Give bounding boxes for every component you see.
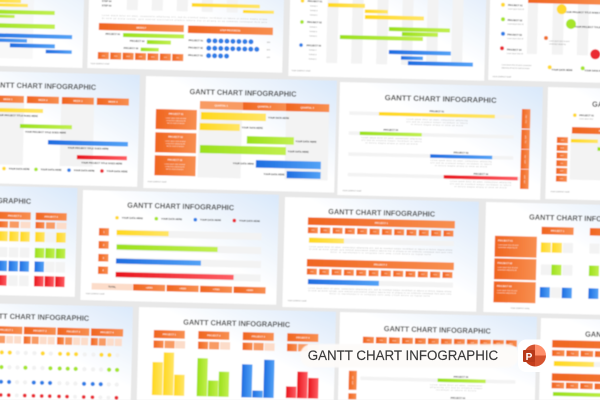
slide: project box matrix right: Lorem ipsum dolor sit amet xyxy=(497,289,518,292)
slide: weekly gantt with legend: YOUR PROJECT TITLE GOES HERE xyxy=(68,147,109,151)
slide: gantt with vertical quarter labels: Lorem ipsum dolor sit amet, consectetur adipiscing xyxy=(450,180,511,184)
slide: project box matrix right: consectetur adipiscing elit xyxy=(497,291,517,295)
slide: two project monthly tracks: FEB xyxy=(322,271,327,274)
slide: column charts: PROJECT 4 xyxy=(296,336,310,340)
slide: gantt with vertical quarter labels: OCT - DEC xyxy=(526,114,528,123)
slide: project box matrix right: PROJECT 01 xyxy=(498,239,513,243)
slide: bottom centre timeline: MAR xyxy=(392,339,397,342)
slide: gantt with vertical quarter labels: et dolore magna aliqua ut enim ad minim xyxy=(365,141,418,146)
slide: bottom centre timeline: NOV xyxy=(496,343,501,345)
slide: weekly and step progress: PROJECT 03 xyxy=(124,47,139,50)
slide: two project monthly tracks: Ut enim ad minim veniam, quis nostrud exercitation ullamco laboris nisi ut aliquip ex ea commodo consequat duis aute irure xyxy=(308,289,451,296)
slide: column charts: PROJECT 1 xyxy=(163,333,177,336)
slide: gantt with vertical quarter labels: Lorem ipsum dolor sit amet, consectetur adipiscing xyxy=(362,136,422,141)
slide: gantt with vertical quarter labels: elit sed do eiusmod tempor incididunt ut labore xyxy=(362,139,422,143)
slide: bottom centre timeline: MAY xyxy=(419,340,423,343)
slide: quarterly gantt with project boxes: Lorem ipsum dolor sit amet xyxy=(165,162,186,166)
slide: bottom centre timeline: APR xyxy=(406,340,410,343)
slide: top-right bubble timeline: Lorem ipsum dolor sit xyxy=(507,52,523,55)
slide: dot matrix: PROJECT 4 xyxy=(100,331,114,334)
slide: quarterly gantt with project boxes: YOUR DATA HERE xyxy=(268,116,290,120)
slide: progress bars with totals: YOUR DATA HERE xyxy=(161,218,183,221)
slide: quarterly gantt with project boxes xyxy=(143,76,337,193)
slide: right monthly gantt: MAR xyxy=(560,146,565,150)
slide: project box matrix right: PROJECT 1 xyxy=(551,230,565,233)
slide: top-right bubble timeline: Lorem ipsum dolor sit xyxy=(507,22,524,26)
slide: project box matrix right: YOUR COMPANY NAME xyxy=(510,307,530,310)
slide: project subtasks gantt: Subtask B xyxy=(310,9,318,12)
slide: weekly and step progress: WEEKLY xyxy=(136,26,147,30)
slide: project box matrix right: consectetur adipiscing elit xyxy=(498,246,518,249)
slide: two project monthly tracks: JUN xyxy=(372,273,376,275)
slide: two project monthly tracks: PROJECT 2 xyxy=(374,263,388,267)
slide: project box matrix right: Lorem ipsum dolor sit amet xyxy=(498,243,519,247)
slide: gantt with vertical quarter labels: PROJECT 04 xyxy=(474,173,489,176)
icon: PowerPoint logo tile xyxy=(518,340,551,372)
slide: progress bars with totals: 3 xyxy=(103,257,105,260)
slide: bottom centre timeline: APR - JUN xyxy=(351,375,354,385)
slide: weekly and step progress: STEP 03 xyxy=(102,4,112,8)
slide: quarterly gantt with project boxes: PROJECT 03 xyxy=(168,159,183,162)
slide: project subtasks gantt: PROJECT 02 xyxy=(307,21,322,24)
slide: bottom centre timeline: JUL xyxy=(445,342,448,344)
slide: progress bars with totals: TOTAL xyxy=(108,286,117,289)
slide: column charts xyxy=(137,307,336,400)
slide: progress bars with totals: +5000 xyxy=(246,289,254,292)
slide: dot matrix: PROJECT 1 xyxy=(0,329,14,332)
slide: two project monthly tracks: SEP xyxy=(409,274,413,276)
slide: quarterly gantt with project boxes: PROJECT 02 xyxy=(168,136,184,139)
slide: gantt with vertical quarter labels: PROJECT 01 xyxy=(429,110,445,113)
slide: project box matrix right: PROJECT 02 xyxy=(497,262,513,265)
slide: top-right bubble timeline: YOUR COMPANY NAME xyxy=(492,75,512,79)
slide: two project monthly tracks: Ut enim ad minim veniam, quis nostrud exercitation ullamco laboris nisi ut aliquip ex ea commodo consequat duis aute irure xyxy=(309,248,452,254)
slide: right monthly gantt: PROJECT 01 xyxy=(579,114,595,117)
slide: progress bars with totals: +7000 xyxy=(213,288,220,291)
slide: two project monthly tracks: MAY xyxy=(359,271,364,274)
slide: bottom centre timeline: PROJECT 04 xyxy=(454,376,469,379)
slide: two project monthly tracks: MAR xyxy=(335,271,339,274)
slide: quarterly gantt with project boxes: YOUR DATA HERE xyxy=(233,162,254,166)
slide: gantt with vertical quarter labels: et dolore magna aliqua ut enim ad minim xyxy=(411,123,464,127)
slide: weekly gantt with legend: YOUR DATA HERE xyxy=(107,170,128,173)
slide: right monthly gantt: JUL xyxy=(560,163,563,165)
slide: weekly and step progress: PROJECT 01 xyxy=(188,39,204,43)
slide: gantt with vertical quarter labels: elit sed do eiusmod tempor incididunt ut labore xyxy=(431,161,492,166)
slide: weekly and step progress: 90% xyxy=(267,49,271,51)
slide: right monthly gantt: SEP xyxy=(560,171,564,173)
slide: right monthly gantt: JAN xyxy=(561,139,565,142)
slide: two project monthly tracks: APR xyxy=(348,230,352,233)
slide: quarterly gantt with project boxes: YOUR COMPANY NAME xyxy=(147,180,167,184)
slide: right monthly gantt: Lorem ipsum dolor xyxy=(579,117,594,121)
slide: quarterly gantt with project boxes: consectetur adipiscing elit xyxy=(165,165,185,168)
slide: bottom centre timeline: SEP xyxy=(471,342,475,344)
slide: bottom-right monthly tracks: JAN xyxy=(556,384,560,387)
slide: right monthly gantt xyxy=(545,87,600,204)
slide: two project monthly tracks: Dolor in reprehenderit in voluptate velit esse cillum dolore eu fugiat nulla xyxy=(331,251,431,256)
slide: quarterly gantt with project boxes: consectetur adipiscing elit xyxy=(166,142,186,145)
slide: gantt with vertical quarter labels: GANTT CHART INFOGRAPHIC xyxy=(385,93,497,105)
slide: bottom centre timeline xyxy=(338,312,537,400)
slide: project subtasks gantt: PROJECT 03 xyxy=(306,44,322,48)
slide: progress bars with totals: +4000 xyxy=(179,287,187,290)
slide: gantt with vertical quarter labels xyxy=(337,82,543,200)
slide: two project monthly tracks: FEB xyxy=(324,230,328,232)
slide: gantt with vertical quarter labels: et dolore magna aliqua ut enim ad minim xyxy=(435,164,488,168)
slide: gantt with vertical quarter labels: Lorem ipsum dolor sit amet, consectetur adipiscing xyxy=(407,118,468,122)
slide: quarterly gantt with project boxes: YOUR DATA HERE xyxy=(242,126,263,130)
slide: quarterly gantt with project boxes: YOUR DATA HERE xyxy=(288,150,309,154)
slide: quarterly gantt with project boxes: GANTT CHART INFOGRAPHIC xyxy=(189,87,297,99)
slide: bottom centre timeline: DEC xyxy=(509,343,514,345)
slide: weekly and step progress: JUN xyxy=(164,57,168,59)
slide: weekly and step progress: YOUR COMPANY NAME xyxy=(90,62,110,66)
slide: progress bars with totals: YOUR DATA HERE xyxy=(200,219,222,222)
slide: column charts: PROJECT 3 xyxy=(252,335,266,339)
slide: top-right bubble timeline: YOUR DATA HERE xyxy=(551,69,573,72)
slide: weekly and step progress: STEP PROGRESS xyxy=(220,29,241,33)
slide: two project monthly tracks: JAN xyxy=(311,229,315,232)
slide: weekly gantt with legend: YOUR PROJECT TITLE GOES HERE xyxy=(81,161,123,165)
slide: bottom-right monthly tracks: FEB xyxy=(571,353,575,355)
slide: weekly and step progress: JUL xyxy=(176,57,179,59)
slide: project subtasks gantt: Subtask A xyxy=(309,25,318,29)
slide: weekly and step progress: FEB xyxy=(114,56,118,58)
slide: two project monthly tracks: DEC xyxy=(447,233,451,235)
slide: project subtasks gantt: Subtask C xyxy=(310,13,318,17)
slide: weekly and step progress: MAR xyxy=(126,55,131,58)
slide: bottom centre timeline: AUG xyxy=(457,341,462,344)
slide: weekly and step progress: Lorem ipsum dolor sit amet, consectetur adipiscing elit, sed do eiusmod tempor incididunt ut labore et dolore magna aliqua xyxy=(102,14,267,21)
slide: quarterly gantt with project boxes: consectetur adipiscing elit xyxy=(166,119,186,122)
slide: two project monthly tracks: NOV xyxy=(434,233,439,235)
slide: bottom centre timeline: JUN xyxy=(432,341,436,343)
slide: top-right bubble timeline: Lorem ipsum dolor sit xyxy=(508,7,525,11)
slide: bottom centre timeline: adipiscing elit sed do eiusmod tempor xyxy=(430,386,483,390)
slide: project block matrix left: PROJECT 4 xyxy=(45,215,59,219)
slide: gantt with vertical quarter labels: PROJECT 04 xyxy=(383,129,399,132)
slide: quarterly gantt with project boxes: sed do eiusmod tempor xyxy=(166,168,184,171)
slide: project subtasks gantt xyxy=(288,0,487,81)
slide: quarterly gantt with project boxes: PROJECT 01 xyxy=(169,113,184,116)
slide: quarterly gantt with project boxes: YOUR DATA HERE xyxy=(295,140,317,144)
slide: column charts: GANTT CHART INFOGRAPHIC xyxy=(183,318,291,329)
slide: dot matrix: PROJECT 3 xyxy=(67,330,81,334)
slide: bottom-right monthly tracks: FEB xyxy=(570,385,575,387)
slide: quarterly gantt with project boxes: QUARTAL 1 xyxy=(215,104,229,108)
slide: two project monthly tracks: MAR xyxy=(336,229,340,232)
slide: project subtasks gantt: Subtask B xyxy=(309,30,318,33)
slide: top-right bubble timeline: PROJECT 04 xyxy=(507,48,522,52)
slide: project box matrix right: consectetur adipiscing elit xyxy=(497,268,517,272)
slide: weekly and step progress: 40% xyxy=(267,57,270,59)
slide: dot matrix xyxy=(0,302,133,400)
slide: two project monthly tracks: GANTT CHART INFOGRAPHIC xyxy=(328,207,436,219)
slide: weekly and step progress: PROJECT 03 xyxy=(188,54,203,57)
slide: progress bars with totals: YOUR DATA HERE xyxy=(122,217,143,220)
slide: bottom centre timeline: incididunt ut labore et dolore xyxy=(436,388,476,392)
slide: quarterly gantt with project boxes: Lorem ipsum dolor sit amet xyxy=(165,139,186,143)
slide: project subtasks gantt: Subtask C xyxy=(309,34,318,38)
slide: gantt with vertical quarter labels: elit sed do eiusmod tempor incididunt ut labore xyxy=(450,182,511,187)
title pill xyxy=(300,344,519,368)
slide: bottom-right monthly tracks: MAR xyxy=(585,385,589,388)
slide: bottom centre timeline: OCT xyxy=(483,343,487,345)
slide: weekly and step progress: PROJECT 02 xyxy=(130,40,145,43)
slide: bottom-right monthly tracks: JAN xyxy=(557,352,561,355)
slide: two project monthly tracks: Dolor in reprehenderit in voluptate velit esse cillum dolore eu fugiat nulla xyxy=(330,292,430,298)
slide: gantt with vertical quarter labels: JAN - MAR xyxy=(523,174,526,184)
slide: weekly gantt with legend xyxy=(0,70,140,187)
slide: progress bars with totals: GANTT CHART INFOGRAPHIC xyxy=(127,201,235,212)
slide: bottom centre timeline: Lorem ipsum dolor sit amet, consectetur xyxy=(430,383,483,388)
slide: quarterly gantt with project boxes: QUARTAL 2 xyxy=(258,105,272,109)
slide: gantt with vertical quarter labels: et dolore magna aliqua ut enim ad minim xyxy=(454,185,507,189)
slide: project subtasks gantt: YOUR COMPANY NAME xyxy=(291,69,311,73)
slide: two project monthly tracks: AUG xyxy=(396,272,401,275)
slide: top-right bubble timeline: YOUR PROJECT TITLE xyxy=(574,26,600,29)
slide: right monthly gantt: MAY xyxy=(560,154,565,157)
slide: gantt with vertical quarter labels: YOUR COMPANY NAME xyxy=(342,189,362,193)
slide: two project monthly tracks: OCT xyxy=(421,274,425,276)
slide: top-right bubble timeline: PROJECT 03 xyxy=(507,33,523,37)
slide: two project monthly tracks: JAN xyxy=(310,270,314,273)
slide: weekly and step progress: 80% xyxy=(267,42,271,44)
slide: weekly gantt with legend: YOUR DATA HERE xyxy=(41,168,62,172)
slide: weekly gantt with legend: YOUR DATA HERE xyxy=(9,168,30,171)
slide: top-left gantt xyxy=(0,0,85,68)
slide: project block matrix left: PROJECT 3 xyxy=(8,215,22,218)
slide: gantt with vertical quarter labels: Lorem ipsum dolor sit amet, consectetur adipiscing xyxy=(431,159,492,163)
slide: weekly and step progress: MAY xyxy=(151,56,156,59)
slide: two project monthly tracks: Lorem ipsum dolor sit amet, consectetur adipiscing elit, sed do eiusmod tempor incididunt ut labore et dolore magna aliqua xyxy=(308,287,451,293)
slide: top-right bubble timeline: Lorem ipsum dolor sit amet, consectetur xyxy=(501,63,532,67)
slide: gantt with vertical quarter labels: PROJECT 03 xyxy=(454,151,469,155)
slide: weekly and step progress: Ut enim ad minim veniam, quis nostrud exercitation ullamco laboris nisi ut aliquip ex ea commodo consequat duis aute xyxy=(102,17,267,24)
slide: two project monthly tracks: PROJECT 1 xyxy=(375,222,389,225)
slide: two project monthly tracks: JUL xyxy=(384,273,387,275)
slide: right monthly gantt: NOV xyxy=(560,178,564,180)
slide: two project monthly tracks: AUG xyxy=(397,231,402,234)
slide: progress bars with totals: 2 xyxy=(103,244,105,247)
slide: weekly gantt with legend: YOUR DATA HERE xyxy=(74,169,95,173)
slide: top-right bubble timeline: PROJECT 02 xyxy=(508,19,523,22)
slide: weekly and step progress: PROJECT 02 xyxy=(188,46,204,50)
slide: weekly gantt with legend: WEEK 3 xyxy=(73,100,83,103)
slide: quarterly gantt with project boxes: YOUR DATA HERE xyxy=(264,173,285,176)
slide: two project monthly tracks: SEP xyxy=(410,232,414,234)
slide: two project monthly tracks: NOV xyxy=(433,274,438,276)
slide: project subtasks gantt: PROJECT 01 xyxy=(308,0,323,3)
slide: bottom centre timeline: GANTT CHART INFOGRAPHIC xyxy=(384,324,491,336)
slide: quarterly gantt with project boxes: Lorem ipsum dolor sit amet xyxy=(166,116,187,120)
slide: quarterly gantt with project boxes: QUARTAL 3 xyxy=(300,106,315,110)
slide: two project monthly tracks: YOUR COMPANY NAME xyxy=(287,299,307,303)
slide: top-right bubble timeline xyxy=(488,0,600,85)
slide: top-right bubble timeline: adipiscing elit sed do eiusmod tempor xyxy=(501,66,530,70)
slide: weekly and step progress: APR xyxy=(139,55,143,58)
slide: weekly and step progress xyxy=(87,0,285,73)
slide: progress bars with totals: YOUR COMPANY NAME xyxy=(85,292,105,296)
slide: project block matrix left xyxy=(0,183,77,297)
slide: two project monthly tracks: JUL xyxy=(385,231,388,234)
slide: progress bars with totals: +2000 xyxy=(146,286,153,290)
title text: GANTT CHART INFOGRAPHIC xyxy=(308,348,498,363)
slide: project subtasks gantt: Subtask B xyxy=(309,53,317,56)
slide: project subtasks gantt: Subtask A xyxy=(310,4,318,8)
slide: bottom centre timeline: PROJECT 04 xyxy=(451,397,466,400)
slide: two project monthly tracks xyxy=(282,197,479,312)
slide: two project monthly tracks: JUN xyxy=(373,231,377,233)
slide: quarterly gantt with project boxes: sed do eiusmod tempor xyxy=(167,122,185,125)
slide: weekly gantt with legend: WEEK 1 xyxy=(3,98,13,101)
slide: project box matrix right: PROJECT 03 xyxy=(497,285,512,288)
slide: two project monthly tracks: MAY xyxy=(360,230,365,233)
slide: bottom-right monthly tracks xyxy=(539,318,600,400)
slide: gantt with vertical quarter labels: elit sed do eiusmod tempor incididunt ut labore xyxy=(407,120,468,125)
slide: top-right bubble timeline: Lorem ipsum dolor sit xyxy=(507,37,524,40)
slide: weekly and step progress: JAN xyxy=(102,54,106,57)
slide: weekly gantt with legend: WEEK 2 xyxy=(38,99,48,102)
slide: progress bars with totals: 1 xyxy=(103,231,105,234)
slide: bottom centre timeline: JAN xyxy=(367,339,371,342)
slide: top-right bubble timeline: PROJECT 01 xyxy=(508,4,523,7)
slide: weekly and step progress: PROJECT 01 xyxy=(105,33,121,36)
slide: project box matrix right xyxy=(483,202,600,317)
slide: progress bars with totals xyxy=(80,190,279,305)
slide: gantt with vertical quarter labels: JUL - SEP xyxy=(525,135,527,143)
slide: two project monthly tracks: APR xyxy=(347,271,351,274)
slide: two project monthly tracks: DEC xyxy=(446,274,450,277)
slide: bottom-right monthly tracks: MAR xyxy=(585,352,590,355)
slide: weekly gantt with legend: YOUR PROJECT TITLE GOES HERE xyxy=(25,131,66,135)
slide: project box matrix right: Lorem ipsum dolor sit amet xyxy=(497,266,518,269)
slide: two project monthly tracks: OCT xyxy=(422,232,426,234)
slide: column charts: PROJECT 2 xyxy=(207,334,221,338)
slide: bottom centre timeline: FEB xyxy=(380,340,384,342)
slide: progress bars with totals: YOUR DATA HERE xyxy=(239,220,260,223)
icon: PowerPoint logo tile: P xyxy=(526,352,533,363)
slide: quarterly gantt with project boxes: sed do eiusmod tempor xyxy=(166,145,185,148)
slide: dot matrix: PROJECT 2 xyxy=(33,329,47,333)
slide: top-right bubble timeline: consectetur adipiscing xyxy=(549,42,566,46)
slide: gantt with vertical quarter labels: APR - JUN xyxy=(524,154,527,164)
slide: weekly gantt with legend: WEEK 4 xyxy=(108,101,118,104)
slide: right monthly gantt: YOUR COMPANY NAME xyxy=(550,190,570,194)
slide: top-right bubble timeline: Lorem ipsum dolor sit amet xyxy=(549,39,570,43)
slide: two project monthly tracks: Lorem ipsum dolor sit amet, consectetur adipiscing elit, sed do eiusmod tempor incididunt ut labore et dolore magna aliqua xyxy=(309,245,452,252)
slide: project subtasks gantt: Subtask A xyxy=(309,48,317,52)
slide: progress bars with totals: 4 xyxy=(102,269,104,272)
slide: project subtasks gantt: Subtask C xyxy=(309,57,317,61)
